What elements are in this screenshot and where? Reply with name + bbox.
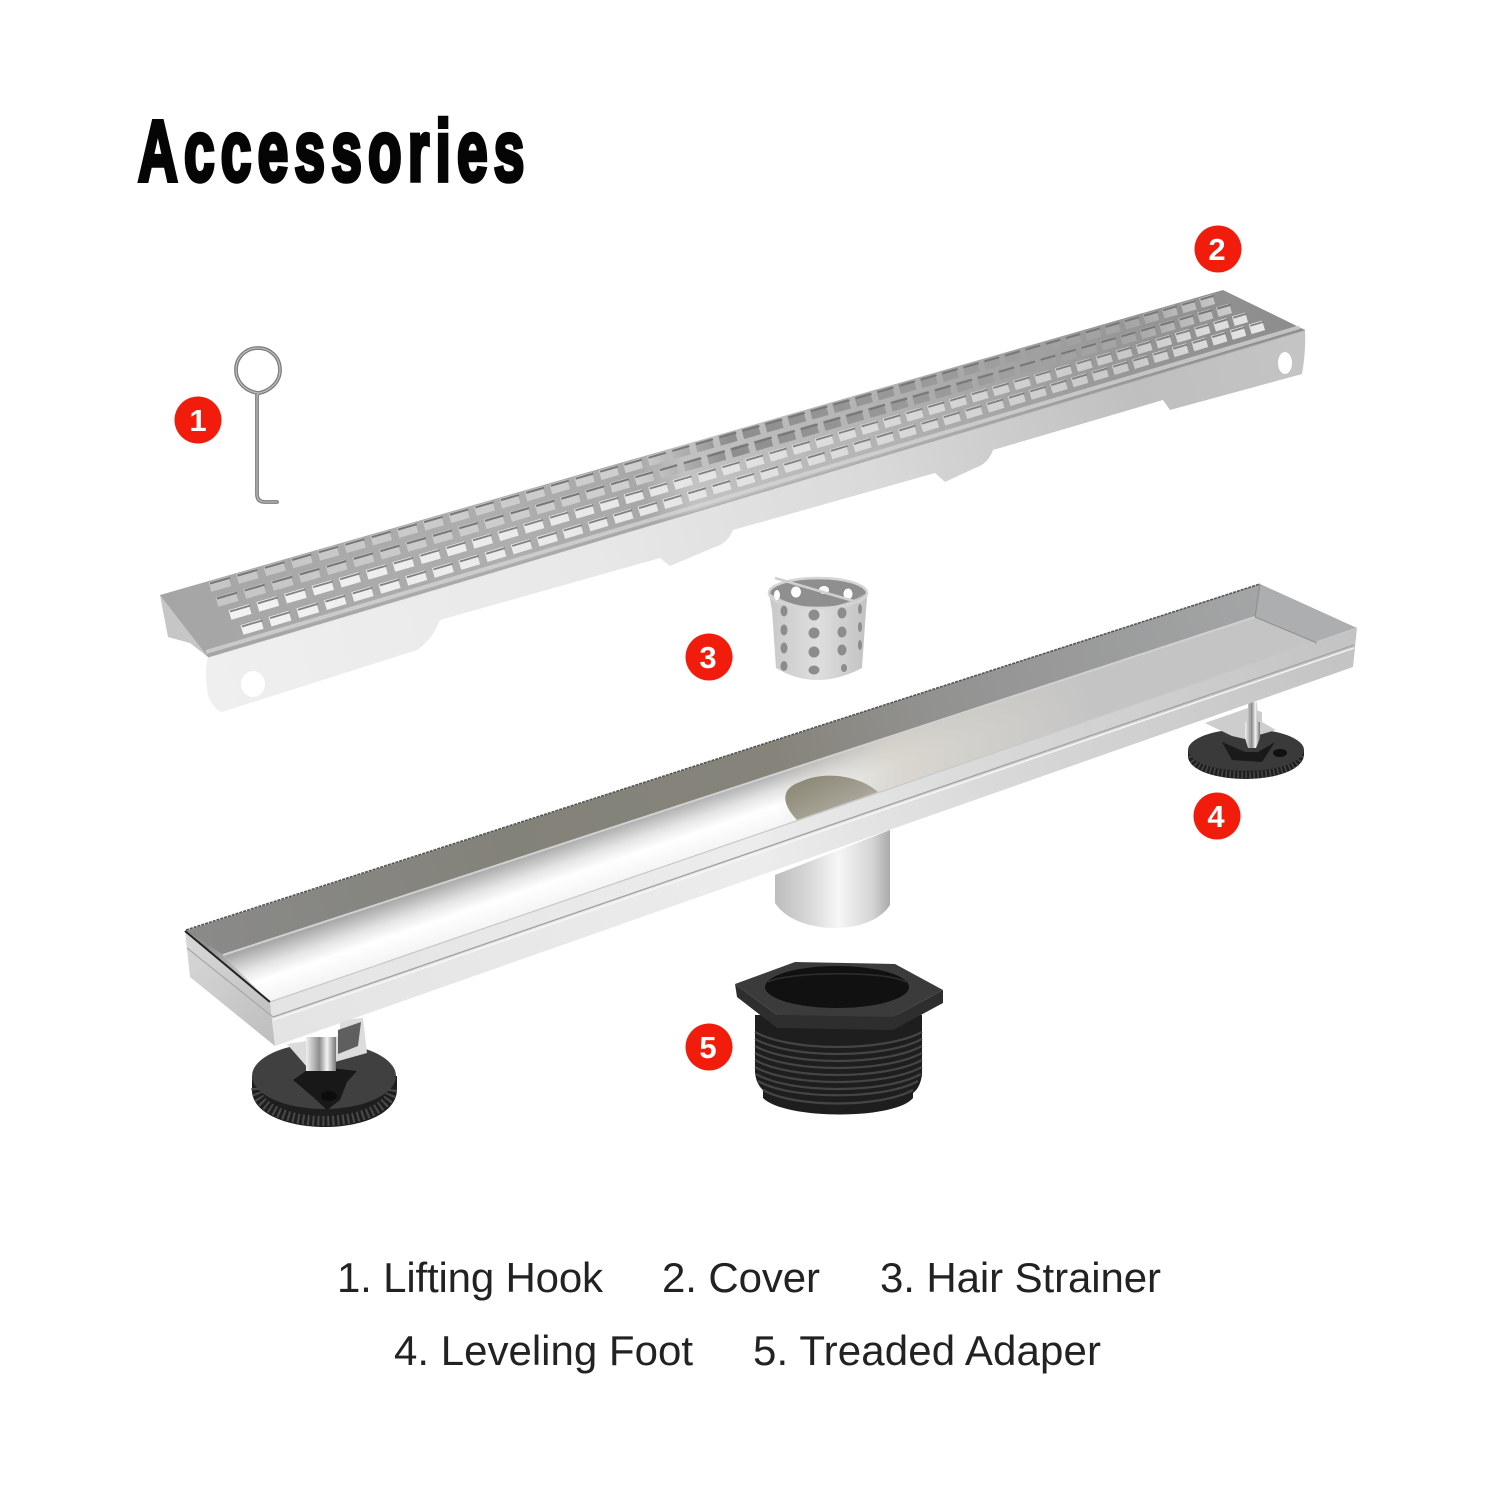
cover fold highlight [206, 327, 1300, 652]
adapter opening [765, 966, 909, 1008]
foot ridges [1192, 756, 1300, 775]
foot disc edge [1188, 750, 1304, 779]
drain cover [160, 290, 1305, 712]
badge 4 [1194, 792, 1240, 840]
strainer holes [780, 604, 862, 674]
strainer top holes [774, 586, 852, 600]
adapter threads [755, 1032, 922, 1104]
foot disc top [252, 1043, 396, 1109]
adapter hex flange top [735, 962, 943, 1017]
foot disc top [1188, 729, 1304, 771]
right leveling foot [1188, 702, 1304, 779]
foot screw [306, 1037, 336, 1071]
strainer rim [769, 578, 867, 608]
foot disc slot [1273, 749, 1287, 757]
legend item 2: 2. Cover [662, 1254, 820, 1301]
badge 2: 2 [1208, 232, 1226, 267]
strainer body [769, 593, 867, 680]
badge 3 [686, 634, 732, 680]
drain pipe [775, 830, 890, 928]
cover side face [206, 330, 1305, 712]
channel drain body [185, 584, 1357, 1046]
adapter hex flange side [735, 984, 943, 1030]
channel rim lines [185, 584, 1357, 1020]
badge 5 [686, 1024, 732, 1070]
foot shadow [293, 1066, 357, 1110]
badge 1 [174, 396, 222, 444]
floor right tint [223, 617, 1317, 1002]
strainer handle [775, 578, 857, 602]
foot screw [1245, 702, 1260, 748]
channel floor [223, 617, 1317, 1002]
channel left wall [185, 931, 275, 1046]
channel end wall [1255, 584, 1357, 643]
legend item 1: 1. Lifting Hook [337, 1254, 604, 1301]
foot ridges [256, 1088, 392, 1121]
badge 4: 4 [1207, 799, 1225, 834]
cover inner flap [160, 595, 208, 657]
title: Accessories [138, 104, 531, 200]
badge 2 [1194, 226, 1242, 272]
badge 3: 3 [699, 640, 717, 675]
foot bracket [1205, 708, 1276, 739]
threaded adapter [735, 962, 943, 1114]
channel outlet hole [785, 776, 878, 820]
legend item 3: 3. Hair Strainer [880, 1254, 1161, 1301]
hair strainer [769, 578, 867, 680]
legend item 4: 4. Leveling Foot [394, 1327, 693, 1374]
foot bracket [287, 1018, 367, 1067]
strainer inner wall [769, 579, 867, 607]
channel back wall [185, 584, 1260, 955]
cover perforation rows [210, 294, 1268, 630]
cover mounting holes [241, 352, 1292, 697]
cover top face [160, 290, 1305, 657]
adapter thread body [755, 1015, 922, 1114]
parts legend [337, 1254, 1161, 1374]
cover fold edge [208, 330, 1305, 657]
legend item 5: 5. Treaded Adaper [753, 1327, 1101, 1374]
icon: lifting hook [236, 348, 280, 502]
left leveling foot [252, 1018, 397, 1127]
channel front wall [270, 628, 1357, 1046]
badge 5: 5 [699, 1030, 717, 1065]
badge 1: 1 [189, 403, 207, 438]
foot disc edge [252, 1076, 397, 1127]
channel left inner wall [185, 931, 270, 1002]
